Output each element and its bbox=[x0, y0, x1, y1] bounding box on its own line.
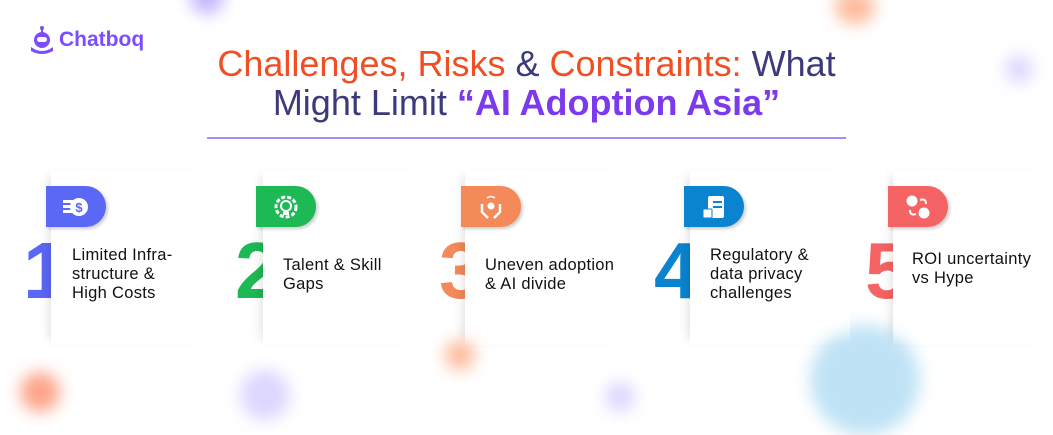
panel: 1: structure & bbox=[72, 265, 155, 283]
panel: 4 bbox=[654, 176, 850, 340]
panel: 1 bbox=[23, 176, 172, 340]
logo: Chatboq bbox=[59, 28, 144, 51]
panel: 1: Limited Infra- bbox=[72, 246, 172, 264]
icon: hands bbox=[461, 186, 521, 227]
icon: ROI arrows bbox=[888, 186, 948, 227]
icon: data privacy bbox=[684, 186, 744, 227]
panel: 5 bbox=[865, 176, 1031, 340]
icon: bot bbox=[31, 26, 53, 54]
panel: 4: 4 bbox=[654, 226, 698, 315]
panel: 4: data privacy bbox=[710, 265, 803, 283]
panel: 3: 3 bbox=[439, 226, 484, 315]
panel: 3 bbox=[439, 176, 614, 340]
icon: coins bbox=[46, 186, 106, 227]
title bbox=[217, 43, 836, 123]
panel: 2: Talent & Skill bbox=[283, 256, 382, 274]
panel: 1: High Costs bbox=[72, 284, 156, 302]
panel: 3: Uneven adoption bbox=[485, 256, 614, 274]
panel: 3: & AI divide bbox=[485, 275, 566, 293]
panel: 2: Gaps bbox=[283, 275, 324, 293]
panel: 5: vs Hype bbox=[912, 269, 974, 287]
panel: 2: 2 bbox=[235, 226, 280, 315]
panel: 4: Regulatory & bbox=[710, 246, 809, 264]
panel: 1: 1 bbox=[23, 226, 68, 315]
title: Might Limit “AI Adoption Asia” bbox=[273, 82, 780, 123]
logo bbox=[31, 26, 144, 54]
panel: 5: 5 bbox=[865, 226, 910, 315]
panel: 5: ROI uncertainty bbox=[912, 250, 1031, 268]
title: Challenges, Risks & Constraints: What bbox=[217, 43, 836, 84]
panel: 4: challenges bbox=[710, 284, 792, 302]
icon: gear bulb bbox=[256, 186, 316, 227]
icon: coins: $ bbox=[75, 200, 83, 214]
panel: 2 bbox=[235, 176, 382, 340]
